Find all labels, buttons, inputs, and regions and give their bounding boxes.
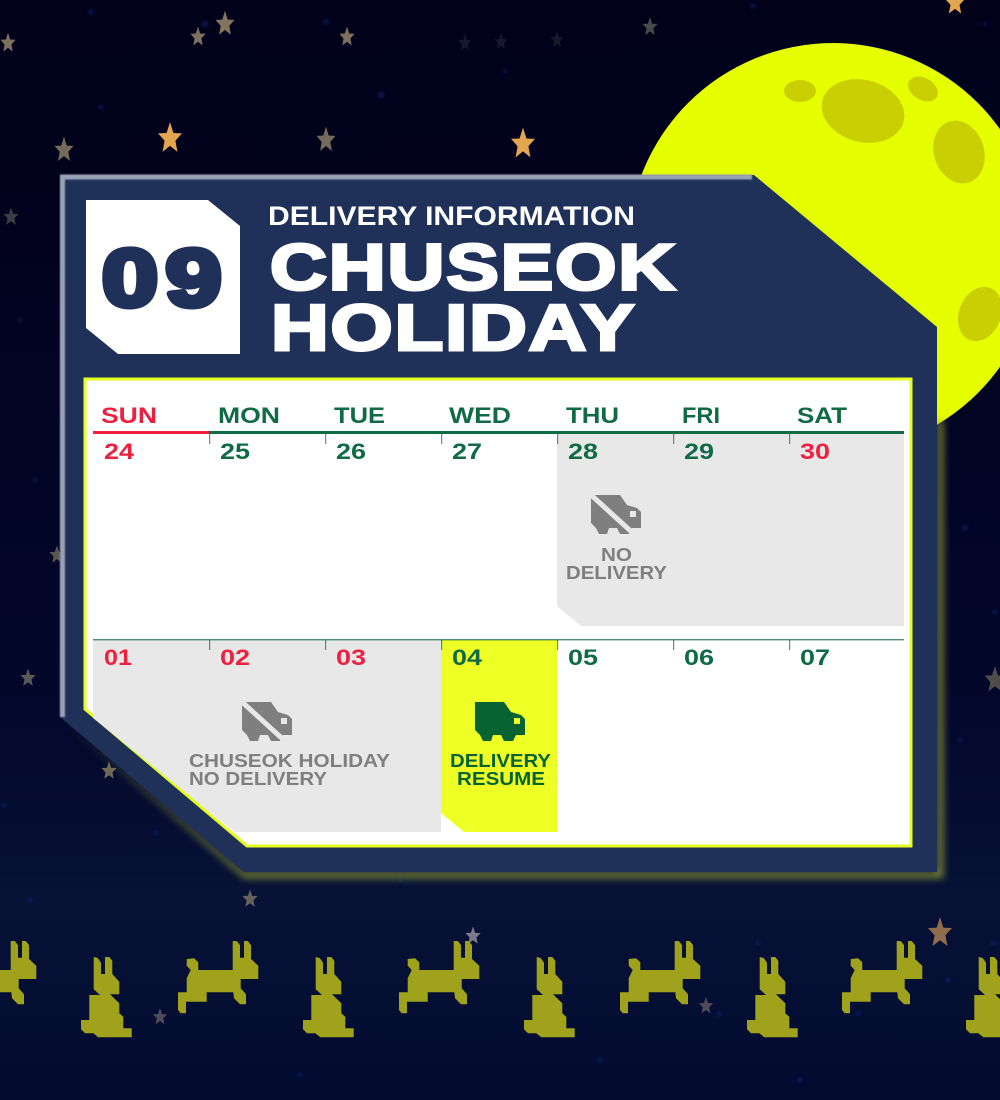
dates row 2: 03 (336, 645, 366, 670)
chuseok holiday block 01-03: NO DELIVERY (189, 769, 327, 789)
weekday header: FRI (682, 403, 720, 428)
date badge (86, 200, 240, 354)
weekday header: TUE (334, 403, 385, 428)
no delivery block 28-30 (557, 433, 904, 626)
dates row 2: 01 (104, 645, 132, 670)
delivery resume block 04: DELIVERY (450, 751, 551, 771)
rabbits row (0, 941, 1000, 1037)
dates row 1: 27 (452, 439, 482, 464)
delivery resume block 04: RESUME (457, 769, 545, 789)
no delivery block 28-30: DELIVERY (566, 563, 667, 583)
dates row 2: 02 (220, 645, 250, 670)
dates row 1: 24 (104, 439, 135, 464)
heading (268, 201, 677, 364)
heading: DELIVERY INFORMATION (268, 201, 635, 231)
chuseok holiday block 01-03: CHUSEOK HOLIDAY (189, 751, 390, 771)
dates row 2: 04 (452, 645, 483, 670)
heading: HOLIDAY (271, 291, 636, 364)
dates row 2: 05 (568, 645, 598, 670)
grid lines (93, 431, 904, 650)
delivery resume block 04 (441, 640, 557, 832)
panel glow (60, 420, 943, 878)
weekday header: WED (449, 403, 511, 428)
month number: 09 (102, 234, 229, 324)
dates row 1: 29 (684, 439, 714, 464)
dates row 2: 07 (800, 645, 830, 670)
dates row 2 (104, 645, 830, 670)
weekday header: MON (218, 403, 280, 428)
moon craters (784, 70, 1000, 348)
dates row 2: 06 (684, 645, 714, 670)
heading: CHUSEOK (270, 230, 677, 304)
dates row 1: 28 (568, 439, 598, 464)
dates row 1: 25 (220, 439, 250, 464)
weekday header: THU (566, 403, 619, 428)
dates row 1 (104, 439, 830, 464)
weekday header: SAT (797, 403, 847, 428)
no delivery block 28-30: NO (601, 545, 632, 565)
weekday header: SUN (101, 403, 157, 428)
dates row 1: 26 (336, 439, 366, 464)
dates row 1: 30 (800, 439, 830, 464)
icon: truck (475, 702, 525, 741)
icon: crossed truck (241, 701, 292, 742)
moon (628, 43, 1000, 453)
calendar (85, 379, 911, 846)
weekday header (101, 403, 847, 428)
chuseok holiday block 01-03 (93, 640, 441, 832)
icon: crossed truck (590, 494, 641, 535)
panel: delivery information card (60, 175, 937, 872)
